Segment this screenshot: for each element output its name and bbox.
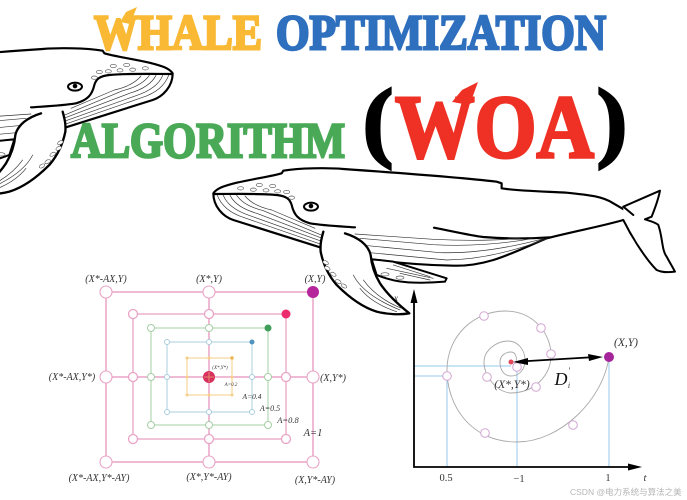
- grid labels: A=0.2: [224, 383, 238, 388]
- belly line: [434, 228, 550, 239]
- grid labels: (X*,Y*-AY): [186, 472, 232, 483]
- spiral labels: [393, 293, 648, 485]
- near flipper: [321, 232, 409, 314]
- axes: [414, 296, 634, 467]
- far flipper: [372, 259, 447, 283]
- spiral labels: 0.5: [439, 473, 453, 484]
- grid labels: (X,Y): [305, 274, 326, 285]
- pink square A=0.8: [128, 310, 290, 444]
- eye: [304, 203, 318, 211]
- icon: small whale, mirrored and cropped at left edge: [0, 48, 173, 194]
- whale body: [213, 168, 633, 266]
- prey centre point: [203, 371, 215, 383]
- head bumps: [238, 183, 295, 199]
- grid labels: (X*,Y*): [212, 366, 228, 371]
- grid labels: (X*,Y): [196, 274, 223, 285]
- grid labels: A=0.5: [259, 404, 280, 413]
- title: OPTIMIZATION: OPTIMIZATION: [276, 4, 606, 60]
- orange square A=0.2: [186, 356, 234, 396]
- distance arrow: [513, 354, 603, 365]
- grid labels: (X*-AX,Y*-AY): [69, 473, 130, 484]
- chart: encircling prey grid: [100, 286, 319, 468]
- grid labels: (X*-AX,Y*): [49, 372, 96, 383]
- blue square A=0.4: [164, 340, 254, 414]
- spiral curve: [447, 311, 609, 442]
- title: WHALE: WHALE: [94, 4, 262, 60]
- grid labels: (X,Y*-AY): [295, 475, 336, 486]
- tail fluke: [623, 191, 675, 272]
- spiral labels: ′: [568, 366, 571, 376]
- watermark: CSDN @电力系统与算法之美: [570, 487, 682, 497]
- outer pink square A=1: [100, 286, 319, 468]
- icon: humpback whale: [213, 168, 675, 314]
- grid labels: (X*-AX,Y): [85, 274, 127, 285]
- grid labels: A=0.8: [276, 415, 300, 425]
- spiral labels: (X,Y): [614, 337, 638, 349]
- title: WOA in brackets: (: [363, 73, 393, 170]
- spiral labels: −1: [513, 474, 525, 485]
- grid labels: A=1: [303, 428, 322, 439]
- spiral labels: x: [393, 293, 398, 303]
- best point and current point: [508, 352, 614, 364]
- grid labels: (X,Y*): [320, 373, 347, 384]
- spiral labels: i: [568, 381, 570, 390]
- spiral labels: (X*,Y*): [494, 379, 530, 391]
- chart: spiral bubble-net update: [393, 289, 648, 485]
- title: WOA in brackets: ): [597, 73, 627, 170]
- title: ALGORITHM: ALGORITHM: [71, 112, 345, 168]
- spiral nodes: [443, 312, 577, 437]
- grid labels: A=0.4: [241, 392, 262, 401]
- title: WOA in brackets: WOA: [395, 78, 594, 177]
- spiral labels: 1: [605, 473, 611, 484]
- grid labels: [49, 274, 347, 486]
- green square A=0.5: [148, 324, 272, 428]
- spiral labels: t: [644, 473, 648, 484]
- spiral labels: D: [554, 369, 568, 389]
- throat pleats: [217, 195, 547, 260]
- blue guide lines: [414, 357, 609, 467]
- mouth line: [214, 194, 355, 227]
